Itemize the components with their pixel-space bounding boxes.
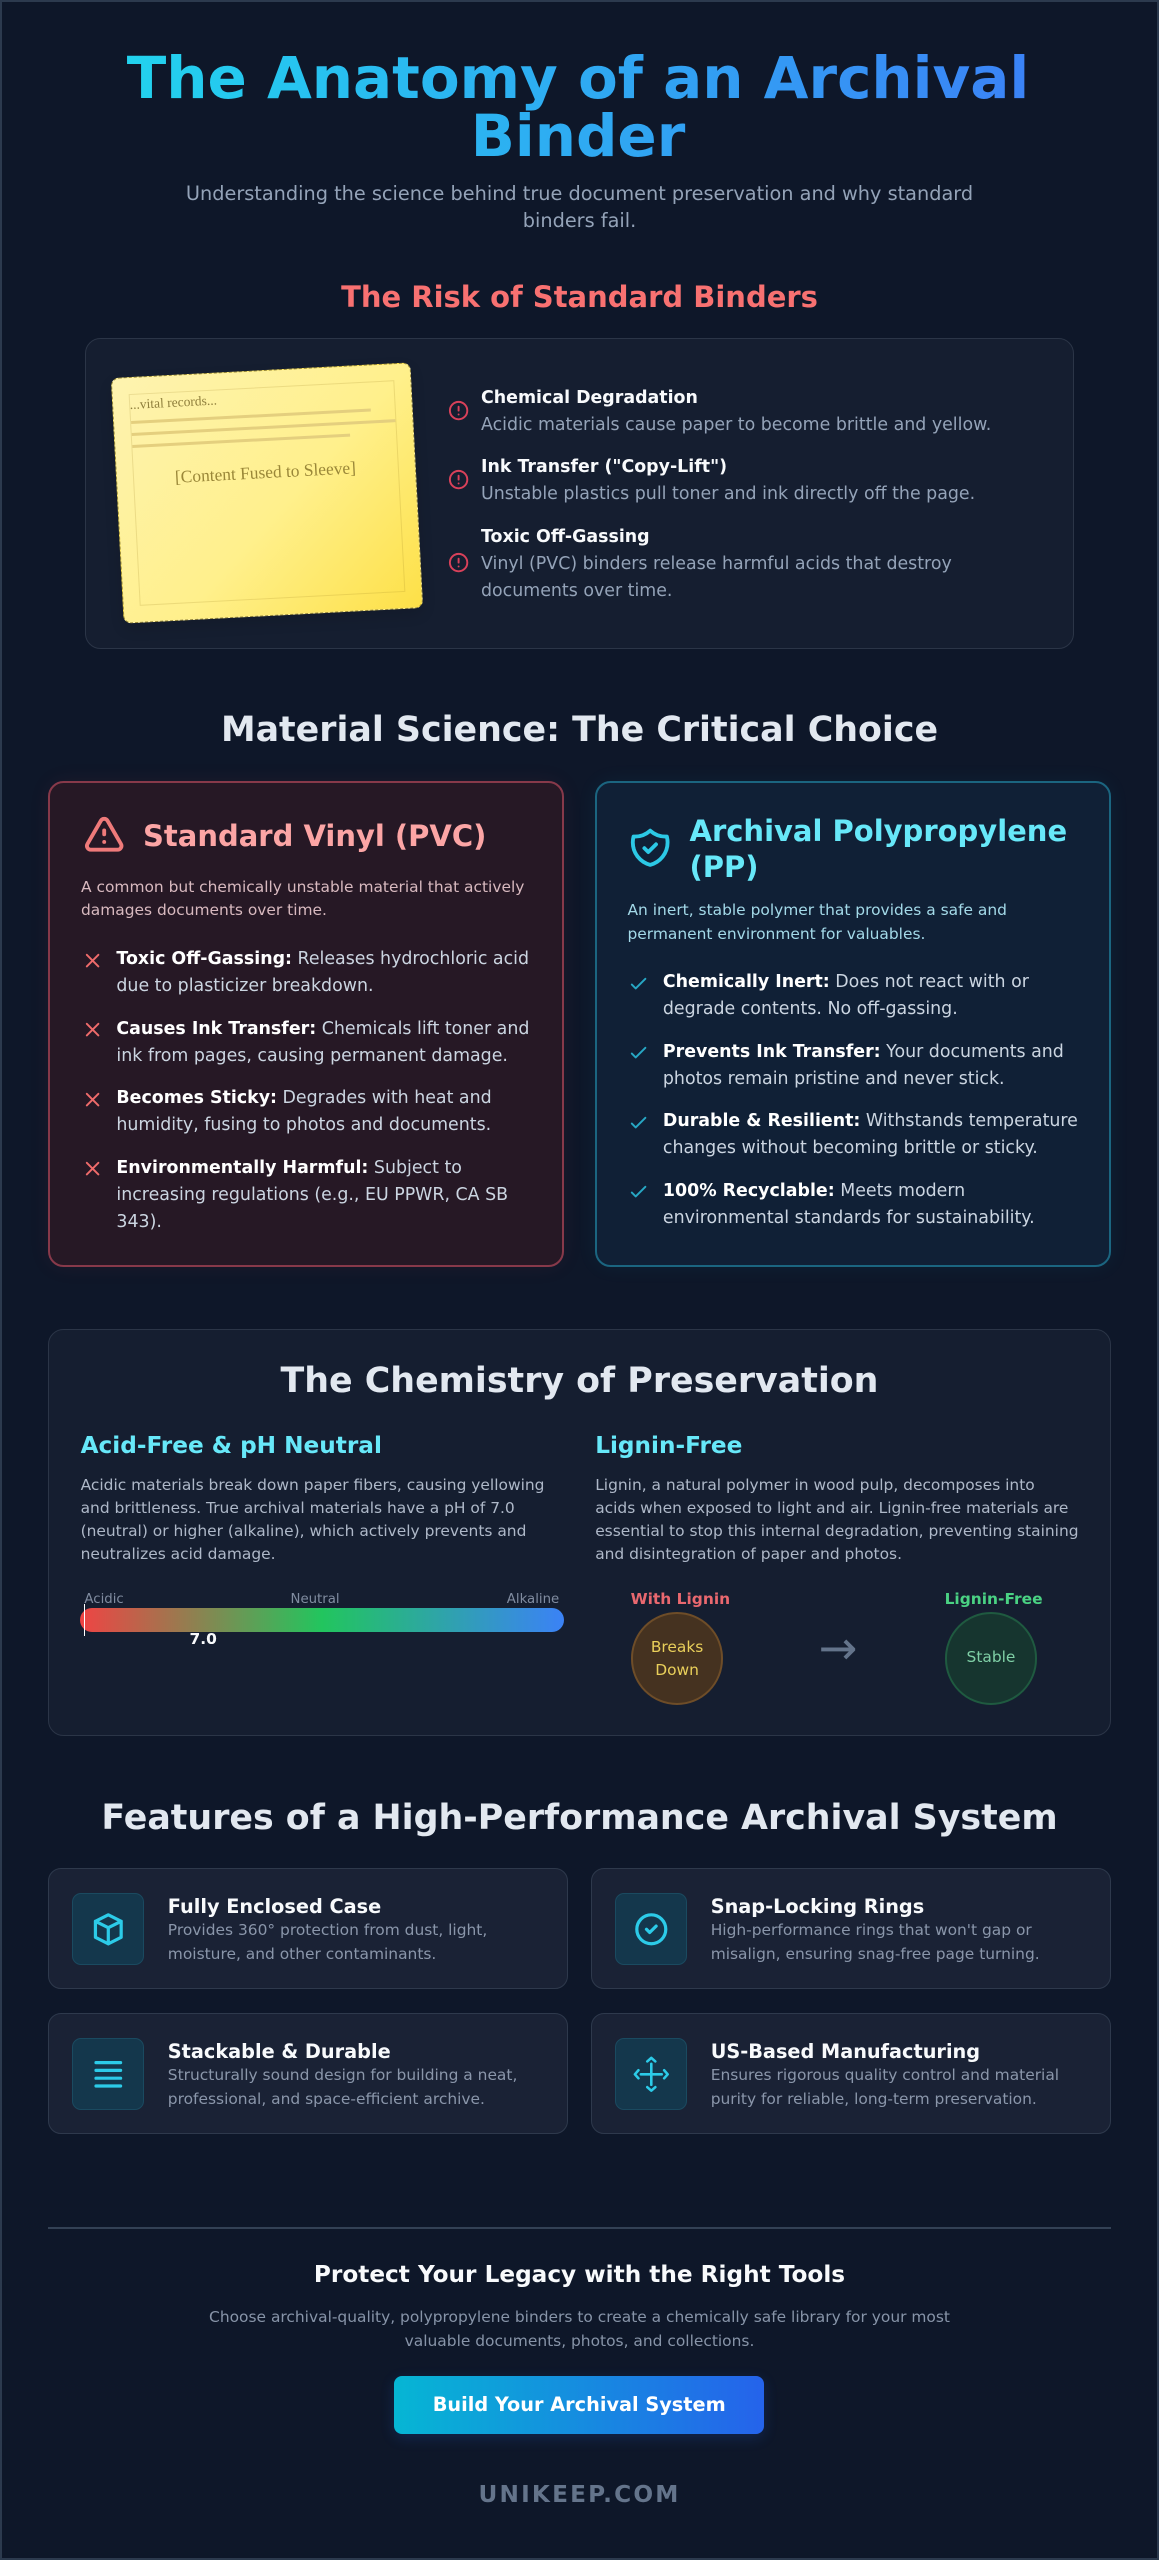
card text (168, 2066, 517, 2108)
item: chemically inert (663, 972, 1029, 1019)
text: lignin-free (595, 1476, 1079, 1563)
card: stackable and durable (48, 2013, 568, 2134)
text: acid-free: (neutral) or higher (alkaline), which actively prevents and (81, 1522, 526, 1540)
description: archival polypropylene: An inert, stable polymer that provides a safe and (628, 901, 1007, 919)
item: environmentally harmful: 343). (116, 1212, 162, 1232)
item: prevents ink transfer (663, 1042, 1064, 1088)
item: environmentally harmful: Environmentally Harmful: Subject to (116, 1158, 462, 1178)
description: standard vinyl (81, 878, 524, 919)
item: becomes sticky (116, 1088, 492, 1135)
illustration: yellowed document in sleeve (110, 362, 423, 624)
description: standard vinyl: A common but chemically unstable material that actively (81, 878, 524, 896)
heading: standard vinyl: Standard Vinyl (PVC) (143, 819, 486, 853)
icon: check 4 (630, 1186, 646, 1198)
panel: chemistry of preservation (48, 1329, 1111, 1736)
card text (711, 1921, 1040, 1962)
label: with lignin: With Lignin (631, 1590, 730, 1608)
value: pH 7.0: 7.0 (190, 1630, 217, 1648)
heading: archival polypropylene: Archival Polypropylene (690, 814, 1067, 848)
icon: check 2 (630, 1046, 646, 1058)
title: Binder (471, 102, 685, 170)
icon: stack lines (72, 2038, 144, 2110)
panel: standard vinyl (48, 781, 564, 1267)
item: causes ink transfer: ink from pages, causing permanent damage. (116, 1046, 508, 1066)
item: toxic off-gassing (116, 949, 529, 996)
item: toxic off-gassing: due to plasticizer breakdown. (116, 976, 374, 996)
heading: archival polypropylene: (PP) (690, 850, 759, 884)
subtitle: binders fail. (523, 209, 636, 232)
text: acid-free: and brittleness. True archival materials have a pH of 7.0 (81, 1499, 515, 1517)
button: build your archival system: Build Your Archival System (433, 2393, 726, 2416)
circle text: breaks down (651, 1638, 703, 1679)
text: call to action: Choose archival-quality, polypropylene binders to create a chemically safe library for your most (209, 2308, 950, 2326)
icon: x 1 (86, 954, 100, 968)
card title: Stackable & Durable (168, 2040, 391, 2063)
risk item: chemical degradation: Chemical Degradation (481, 388, 698, 408)
text: call to action: valuable documents, photos, and collections. (405, 2332, 754, 2350)
title: The Anatomy of an Archival (127, 44, 1029, 112)
heading: material science: Material Science: The Critical Choice (221, 710, 938, 750)
card text: Provides 360° protection from dust, light, (168, 1921, 487, 1939)
marker: pH indicator (84, 1604, 85, 1636)
item: becomes sticky: Becomes Sticky: Degrades with heat and (116, 1088, 492, 1108)
item: environmentally harmful (116, 1158, 508, 1232)
circle: stable (945, 1612, 1037, 1705)
subheading: acid-free: Acid-Free & pH Neutral (81, 1432, 382, 1459)
icon: alert 3 (448, 552, 468, 572)
text: lignin-free: essential to stop this internal degradation, preventing staining (595, 1522, 1079, 1540)
illustration: yellowed document in sleeve: ...vital records... (129, 392, 217, 412)
text: acid-free: Acidic materials break down paper fibers, causing yellowing (81, 1476, 544, 1494)
icon: alert 2 (448, 470, 468, 490)
item: environmentally harmful: increasing regulations (e.g., EU PPWR, CA SB (116, 1185, 508, 1205)
text: lignin-free: and disintegration of paper and photos. (595, 1545, 902, 1563)
card: fully enclosed case (48, 1868, 568, 1989)
card title: US-Based Manufacturing (711, 2040, 980, 2063)
text: acid-free (80, 1476, 544, 1563)
item: causes ink transfer: Causes Ink Transfer: Chemicals lift toner and (116, 1018, 529, 1038)
item: recyclable: 100% Recyclable: Meets modern (663, 1180, 965, 1200)
card title: Fully Enclosed Case (168, 1895, 381, 1918)
icon: alert 1 (448, 400, 468, 420)
icon: check 1 (630, 978, 646, 990)
item: causes ink transfer (116, 1018, 529, 1066)
item: durable and resilient: Durable & Resilient: Withstands temperature (663, 1111, 1078, 1131)
heading: risk of standard binders: The Risk of Standard Binders (341, 280, 818, 314)
card text: misalign, ensuring snag-free page turning. (711, 1944, 1040, 1962)
circle text: breaks down: Breaks (651, 1638, 703, 1656)
circle text: breaks down: Down (655, 1661, 699, 1679)
risk item: toxic off-gassing: Toxic Off-Gassing (481, 526, 650, 546)
item: becomes sticky: humidity, fusing to photos and documents. (116, 1115, 491, 1135)
card: us-based manufacturing (591, 2013, 1111, 2134)
icon: warning triangle (84, 816, 124, 852)
label: acidic: Acidic (84, 1592, 124, 1607)
card text (168, 1921, 487, 1962)
description: standard vinyl: damages documents over time. (81, 901, 327, 919)
title (120, 49, 1036, 165)
label: lignin-free: Lignin-Free (945, 1590, 1043, 1608)
risk item: chemical degradation (481, 388, 991, 435)
risk item: ink transfer: Unstable plastics pull toner and ink directly off the page. (481, 484, 975, 504)
risk item: ink transfer: Ink Transfer ("Copy-Lift") (481, 457, 727, 477)
card text: purity for reliable, long-term preservation. (711, 2090, 1037, 2108)
risk item: ink transfer (481, 457, 975, 504)
card text: Structurally sound design for building a neat, (168, 2066, 517, 2084)
text: acid-free: neutralizes acid damage. (81, 1545, 276, 1563)
heading: archival polypropylene (690, 814, 1067, 884)
item: durable and resilient: changes without becoming brittle or sticky. (663, 1138, 1038, 1158)
card text: High-performance rings that won't gap or (711, 1921, 1032, 1939)
subtitle (186, 182, 973, 232)
item: prevents ink transfer: photos remain pristine and never stick. (663, 1068, 1005, 1088)
item: prevents ink transfer: Prevents Ink Transfer: Your documents and (663, 1042, 1064, 1062)
risk item: toxic off-gassing: Vinyl (PVC) binders release harmful acids that destroy (481, 554, 952, 574)
circle: breaks down (631, 1612, 723, 1705)
icon: check 3 (630, 1116, 646, 1128)
item: toxic off-gassing: Toxic Off-Gassing: Releases hydrochloric acid (116, 949, 529, 969)
description: archival polypropylene (628, 901, 1007, 942)
subtitle: Understanding the science behind true document preservation and why standard (186, 182, 973, 205)
icon: x 2 (86, 1022, 100, 1036)
text: lignin-free: Lignin, a natural polymer in wood pulp, decomposes into (595, 1476, 1035, 1494)
label: neutral: Neutral (290, 1592, 340, 1607)
item: chemically inert: Chemically Inert: Does not react with or (663, 972, 1029, 992)
risk item: chemical degradation: Acidic materials cause paper to become brittle and yellow. (481, 415, 991, 435)
card text: moisture, and other contaminants. (168, 1944, 436, 1962)
card: snap-locking rings (591, 1868, 1111, 1989)
icon: four-way arrows (615, 2038, 687, 2110)
card title: Snap-Locking Rings (711, 1895, 924, 1918)
brand footer: UNIKEEP.COM (478, 2481, 681, 2508)
chart: pH scale bar (80, 1608, 564, 1632)
item: durable and resilient (663, 1111, 1078, 1158)
card text (711, 2066, 1059, 2108)
icon: check circle (615, 1893, 687, 1965)
item: recyclable: environmental standards for sustainability. (663, 1208, 1035, 1228)
icon: shield check (630, 828, 670, 867)
heading: chemistry: The Chemistry of Preservation (281, 1361, 878, 1401)
heading: features: Features of a High-Performance Archival System (101, 1798, 1058, 1838)
subheading: lignin-free: Lignin-Free (595, 1432, 742, 1459)
label: alkaline: Alkaline (507, 1592, 559, 1607)
card text: professional, and space-efficient archive. (168, 2090, 485, 2108)
heading: call to action: Protect Your Legacy with the Right Tools (314, 2261, 845, 2288)
description: archival polypropylene: permanent environment for valuables. (628, 924, 925, 942)
risk item: toxic off-gassing: documents over time. (481, 580, 672, 600)
icon: x 4 (86, 1162, 100, 1176)
button: build your archival system (394, 2376, 764, 2434)
text: call to action (209, 2308, 950, 2350)
text: lignin-free: acids when exposed to light and air. Lignin-free materials are (595, 1499, 1068, 1517)
panel: archival polypropylene (595, 781, 1111, 1267)
circle text: stable: Stable (967, 1648, 1015, 1666)
icon: x 3 (86, 1092, 100, 1106)
panel: risk (85, 338, 1074, 649)
item: recyclable (663, 1180, 1035, 1228)
icon: cube (72, 1893, 144, 1965)
risk item: toxic off-gassing (481, 526, 952, 600)
illustration: yellowed document in sleeve: [Content Fused to Sleeve] (174, 457, 356, 486)
card text: Ensures rigorous quality control and material (711, 2066, 1059, 2084)
arrow: → (819, 1621, 857, 1675)
item: chemically inert: degrade contents. No off-gassing. (663, 999, 958, 1019)
